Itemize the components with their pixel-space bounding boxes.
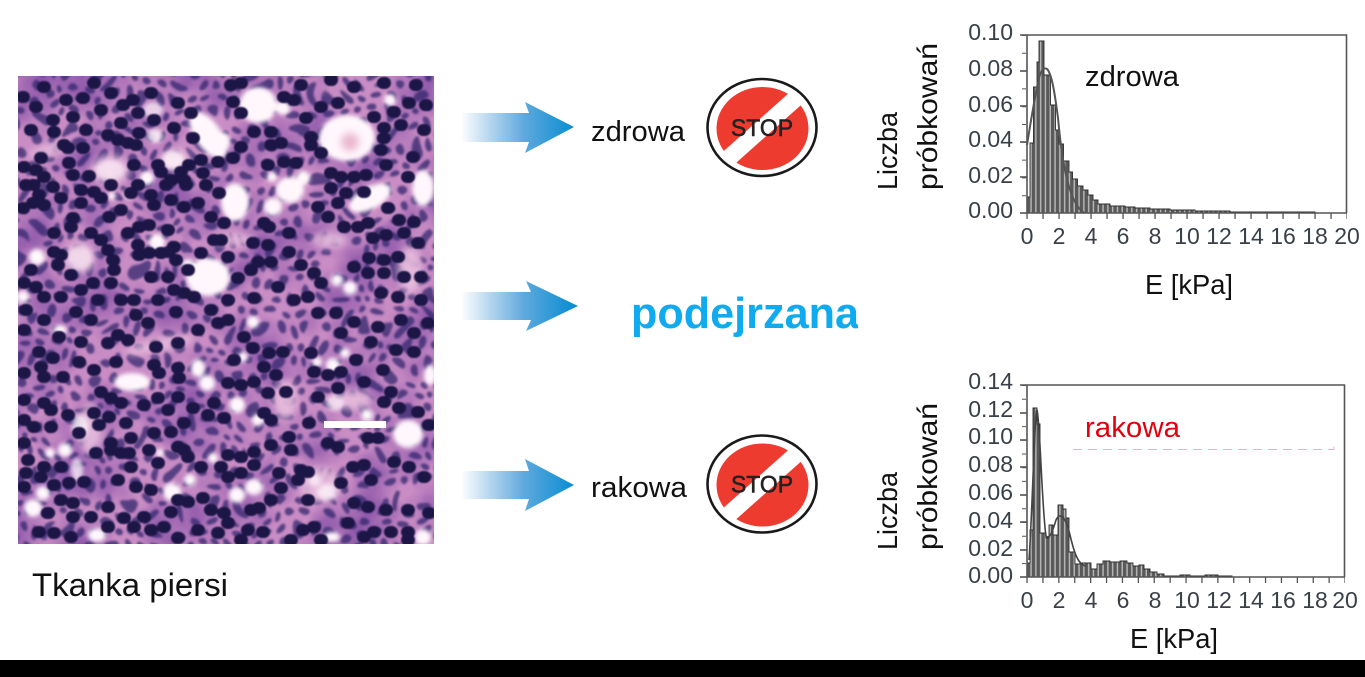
x tick labels: 16	[1270, 223, 1296, 249]
artifact dashed line under label	[1073, 443, 1334, 450]
y tick labels: 0.14	[968, 368, 1013, 394]
y axis title: Liczba	[872, 112, 903, 190]
y tick labels: 0.02	[968, 535, 1013, 561]
healthy chart label: zdrowa	[1085, 61, 1180, 93]
chart: cancerous tissue histogram	[872, 368, 1358, 613]
cancerous chart label: rakowa	[1085, 412, 1181, 444]
chart: healthy tissue histogram	[872, 19, 1360, 249]
gland lumens	[17, 87, 436, 545]
x tick labels: 4	[1085, 223, 1098, 249]
y axis title: próbkowań	[912, 43, 943, 190]
tissue caption: Tkanka piersi	[32, 567, 228, 603]
x tick labels: 10	[1174, 223, 1200, 249]
x tick labels: 10	[1174, 587, 1200, 613]
panel: breast tissue micrograph	[18, 76, 434, 544]
frame and ticks	[1020, 385, 1345, 580]
icon: stop sign bottom	[708, 436, 816, 532]
y tick labels: 0.08	[968, 451, 1013, 477]
label: podejrzana: podejrzana	[631, 289, 860, 338]
scale bar	[324, 421, 386, 428]
pink material in lumens	[341, 133, 359, 151]
axis label: E kPa bottom: E [kPa]	[1130, 623, 1218, 654]
x tick labels	[1021, 223, 1360, 249]
x tick labels: 16	[1270, 587, 1296, 613]
y tick labels: 0.10	[968, 19, 1013, 45]
label: rakowa: rakowa	[591, 472, 688, 504]
x tick labels	[1021, 587, 1358, 613]
x tick labels: 6	[1117, 223, 1129, 249]
x tick labels: 4	[1085, 587, 1098, 613]
fit curve	[1027, 68, 1084, 213]
y tick labels: 0.06	[968, 91, 1013, 117]
y axis title	[872, 43, 943, 190]
y tick labels: 0.06	[968, 479, 1013, 505]
pale stroma patches	[27, 139, 422, 503]
x tick labels: 20	[1334, 223, 1360, 249]
x tick labels: 12	[1206, 223, 1232, 249]
x tick labels: 14	[1238, 587, 1264, 613]
x tick labels: 14	[1238, 223, 1264, 249]
fit curve	[1029, 410, 1086, 566]
y tick labels: 0.00	[968, 562, 1013, 588]
x tick labels: 18	[1302, 223, 1328, 249]
arrow: to cancerous	[461, 459, 574, 511]
x tick labels: 12	[1206, 587, 1232, 613]
icon: stop sign top: STOP	[731, 115, 793, 142]
label: zdrowa: zdrowa	[591, 116, 686, 148]
y tick labels: 0.02	[968, 162, 1013, 188]
y axis title: próbkowań	[912, 403, 943, 550]
bottom black bar	[0, 660, 1365, 677]
x tick labels: 6	[1117, 587, 1129, 613]
x tick labels: 8	[1149, 587, 1161, 613]
icon: stop sign bottom: STOP	[731, 472, 793, 498]
x tick labels: 2	[1053, 587, 1065, 613]
cell nuclei	[22, 80, 430, 540]
frame and ticks	[1020, 35, 1347, 216]
y axis title: Liczba	[872, 472, 903, 550]
x tick labels: 2	[1053, 223, 1065, 249]
y tick labels: 0.00	[968, 197, 1013, 223]
histogram bars	[1027, 408, 1232, 577]
y tick labels: 0.10	[968, 423, 1013, 449]
x tick labels: 0	[1021, 223, 1033, 249]
x tick labels: 0	[1021, 587, 1033, 613]
y tick labels	[968, 368, 1013, 588]
x tick labels: 20	[1332, 587, 1358, 613]
y tick labels	[968, 19, 1013, 223]
histogram bars	[1027, 41, 1315, 213]
axis label: E kPa top: E [kPa]	[1145, 269, 1233, 300]
arrow: to healthy	[461, 102, 574, 153]
y tick labels: 0.04	[968, 507, 1013, 533]
x tick labels: 8	[1149, 223, 1161, 249]
y tick labels: 0.04	[968, 126, 1013, 152]
arrow: to suspect	[461, 281, 578, 331]
y tick labels: 0.12	[968, 396, 1013, 422]
tissue background cell field	[18, 76, 434, 544]
icon: stop sign top	[708, 79, 816, 176]
y tick labels: 0.08	[968, 55, 1013, 81]
y axis title	[872, 403, 943, 550]
x tick labels: 18	[1302, 587, 1328, 613]
